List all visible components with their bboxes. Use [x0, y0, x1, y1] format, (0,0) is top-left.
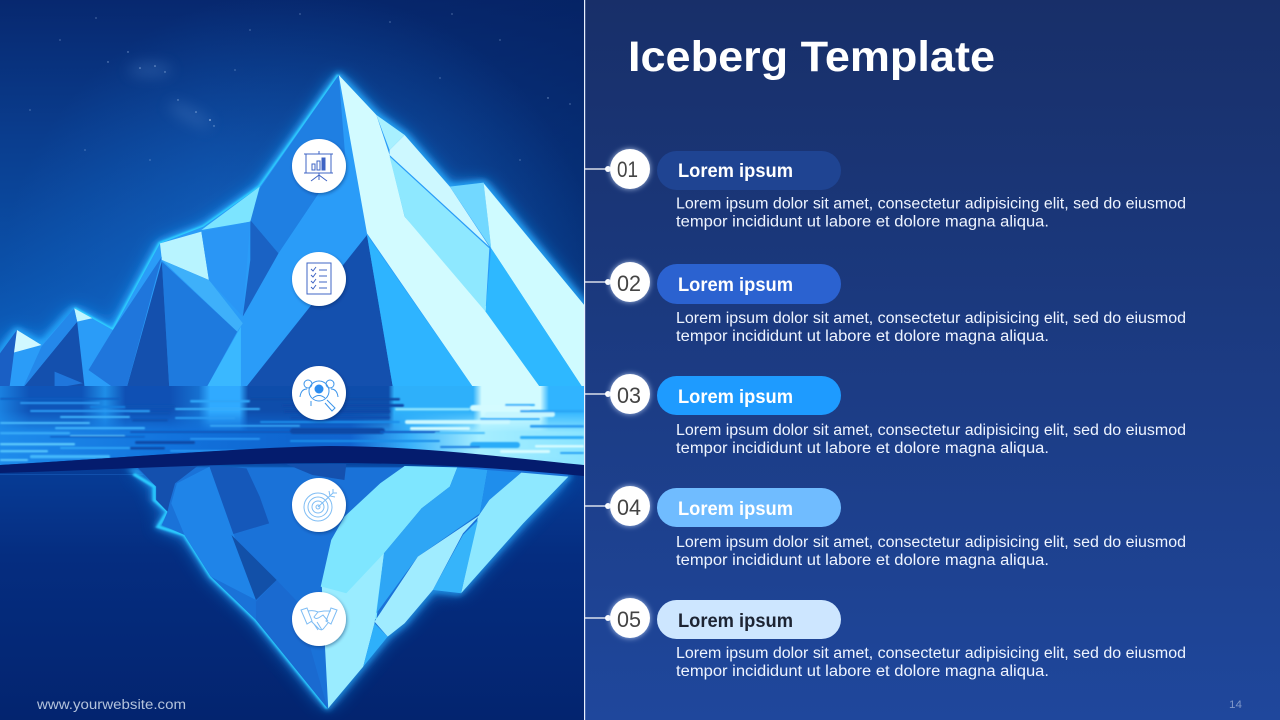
item 04: Lorem ipsum dolor sit amet, consectetur adipisicing elit, sed do eiusmod — [676, 534, 1186, 551]
water surface with ripples — [0, 386, 584, 470]
iceberg below water — [132, 464, 568, 708]
item 01 — [585, 149, 1186, 230]
item 02 — [585, 262, 1186, 345]
icon circle 5: handshake — [292, 592, 346, 646]
item 04: tempor incididunt ut labore et dolore magna aliqua. — [676, 552, 1049, 569]
item 05: 05 — [617, 607, 641, 632]
item 02: Lorem ipsum dolor sit amet, consectetur adipisicing elit, sed do eiusmod — [676, 310, 1186, 327]
item 05: Lorem ipsum dolor sit amet, consectetur adipisicing elit, sed do eiusmod — [676, 645, 1186, 662]
item 03: Lorem ipsum — [678, 387, 793, 408]
item 04: Lorem ipsum — [678, 499, 793, 520]
item 01: tempor incididunt ut labore et dolore magna aliqua. — [676, 214, 1049, 230]
footer website: www.yourwebsite.com — [36, 697, 186, 712]
item 03: Lorem ipsum dolor sit amet, consectetur adipisicing elit, sed do eiusmod — [676, 422, 1186, 439]
page number: 14 — [1229, 699, 1242, 711]
panel: right background — [584, 0, 1280, 720]
icon circle 3: people search — [292, 366, 346, 420]
item 02: Lorem ipsum — [678, 275, 793, 296]
item 03: 03 — [617, 383, 641, 408]
item 05: Lorem ipsum — [678, 611, 793, 632]
icon circle 2: checklist — [292, 252, 346, 306]
icon circle 4: target — [292, 478, 346, 532]
item 04 — [585, 486, 1186, 569]
night sky — [0, 0, 584, 392]
item 02: 02 — [617, 271, 641, 296]
item 03 — [585, 374, 1186, 457]
iceberg above water — [0, 75, 584, 390]
item 02: tempor incididunt ut labore et dolore magna aliqua. — [676, 328, 1049, 345]
item 01: 01 — [617, 157, 638, 182]
panel: iceberg illustration — [0, 0, 584, 720]
divider line — [584, 0, 585, 720]
item 01: Lorem ipsum — [678, 161, 793, 182]
item 05: tempor incididunt ut labore et dolore magna aliqua. — [676, 663, 1049, 680]
item 03: tempor incididunt ut labore et dolore magna aliqua. — [676, 440, 1049, 457]
item 04: 04 — [617, 495, 641, 520]
icon circle 1: presentation board — [292, 139, 346, 193]
waterline dark band — [0, 446, 584, 476]
glow — [0, 75, 584, 388]
item 05 — [585, 598, 1186, 680]
underwater sea — [0, 447, 584, 720]
item 01: Lorem ipsum dolor sit amet, consectetur adipisicing elit, sed do eiusmod — [676, 196, 1186, 212]
title: Iceberg Template — [628, 33, 995, 81]
